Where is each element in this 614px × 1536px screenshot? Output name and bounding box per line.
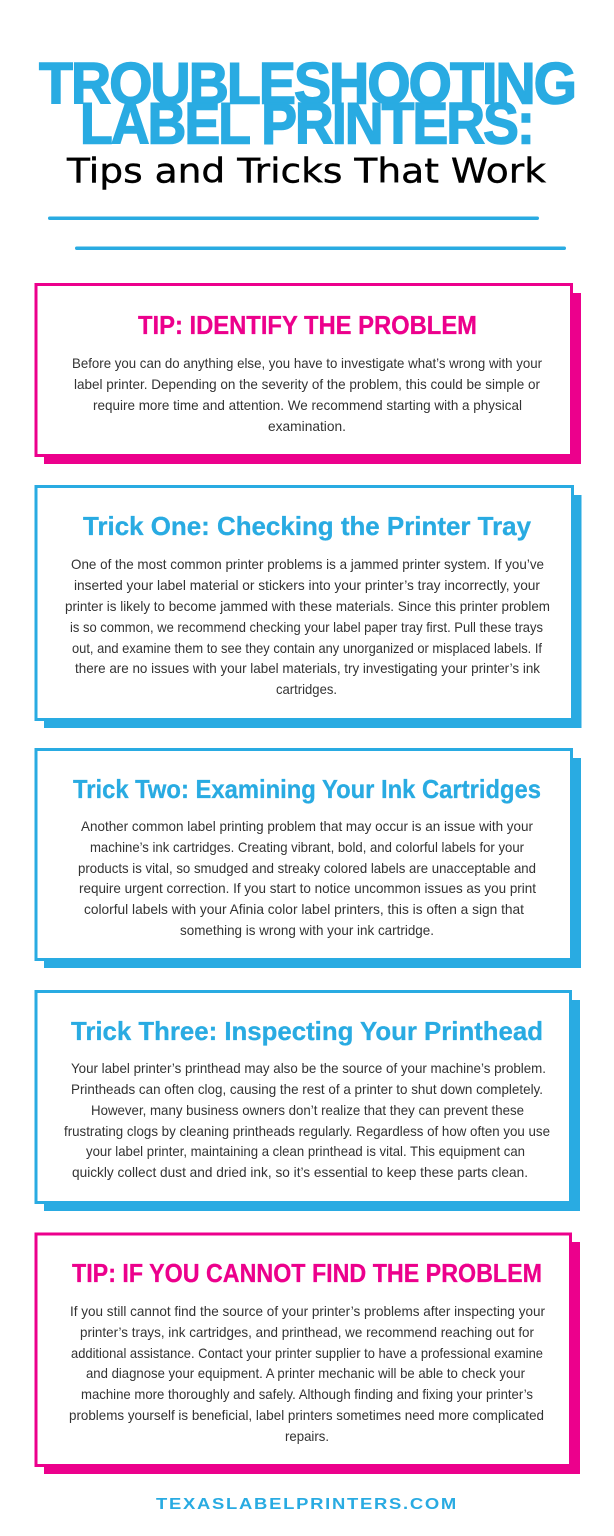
text block: trick three: Printheads can often clog, causing the rest of a printer to shut down completely. [71,1081,543,1097]
text block: trick three: Your label printer’s printhead may also be the source of your machine’s problem. [71,1060,546,1076]
text block: trick two: products is vital, so smudged and streaky colored labels are unacceptable and [78,860,536,876]
title: LABEL PRINTERS: [80,92,533,156]
text block: tip identify the problem: require more time and attention. We recommend starting with a physical [93,397,522,413]
panel: tip identify the problem [36,284,581,464]
panel: trick three [36,992,580,1211]
text block: tip if you cannot find the problem [69,1303,545,1444]
text block: tip identify the problem: Before you can do anything else, you have to investigate what’s wrong with your [72,355,542,371]
text block: trick two [78,818,536,938]
title: TROUBLESHOOTING [39,52,575,116]
text block: trick one: inserted your label material or stickers into your printer’s tray incorrectly, your [74,577,540,593]
text block: trick three [64,1060,550,1180]
text block: tip identify the problem [72,355,542,434]
title: Tips and Tricks That Work [66,152,546,192]
text block: trick one: is so common, we recommend checking your label paper tray first. Pull these trays [70,619,543,635]
heading: tip if you cannot find the problem: TIP: IF YOU CANNOT FIND THE PROBLEM [72,1258,542,1288]
text block: tip if you cannot find the problem: problems yourself is beneficial, label printers sometimes need more complicated [69,1407,544,1423]
footer: website: TEXASLABELPRINTERS.COM [156,1496,458,1513]
text block: trick three: your label printer, maintaining a clean printhead is vital. This equipment can [86,1143,525,1159]
heading: trick two: Trick Two: Examining Your Ink Cartridges [73,774,541,804]
panel: trick two [36,750,581,968]
text block: tip identify the problem: examination. [268,418,346,434]
panel: tip if you cannot find the problem [36,1234,580,1474]
heading: trick three: Trick Three: Inspecting Your Printhead [71,1016,543,1046]
text block: trick two: something is wrong with your ink cartridge. [180,922,434,938]
text block: tip if you cannot find the problem: machine more thoroughly and safely. Although finding and fixing your printer’s [81,1386,533,1402]
text block: trick three: quickly collect dust and dried ink, so it’s essential to keep these parts clean. [72,1164,528,1180]
text block: tip if you cannot find the problem: and diagnose your equipment. A printer mechanic will be able to check your [86,1365,525,1381]
text block: tip if you cannot find the problem: printer’s trays, ink cartridges, and printhead, we recommend reaching out for [80,1324,534,1340]
text block: trick one: there are no issues with your label materials, try investigating your printer’s ink [75,660,541,676]
title [39,52,575,192]
text block: trick two: colorful labels with your Afinia color label printers, this is often a sign that [84,901,524,917]
text block: tip identify the problem: label printer. Depending on the severity of the problem, this could be simple or [74,376,540,392]
text block: tip if you cannot find the problem: repairs. [285,1428,329,1444]
text block: trick two: machine’s ink cartridges. Creating vibrant, bold, and colorful labels for your [90,839,524,855]
text block: trick three: frustrating clogs by cleaning printheads regularly. Regardless of how often you use [64,1123,550,1139]
text block: tip if you cannot find the problem: If you still cannot find the source of your printer’s problems after inspecting your [70,1303,545,1319]
text block: trick two: require urgent correction. If you start to notice uncommon issues as you print [79,880,536,896]
text block: trick two: Another common label printing problem that may occur is an issue with your [81,818,533,834]
text block: trick one: cartridges. [276,681,337,697]
text block: trick one: printer is likely to become jammed with these materials. Since this printer problem [65,598,550,614]
text block: trick one [65,556,550,697]
heading: tip identify the problem: TIP: IDENTIFY THE PROBLEM [138,310,477,340]
heading: trick one: Trick One: Checking the Printer Tray [83,511,532,541]
text block: tip if you cannot find the problem: additional assistance. Contact your printer supplier to have a professional examine [71,1345,543,1361]
panel: trick one [36,486,582,728]
text block: trick one: out, and examine them to see they contain any unorganized or misplaced labels. If [72,640,542,656]
text block: trick one: One of the most common printer problems is a jammed printer system. If you’ve [71,556,544,572]
text block: trick three: However, many business owners don’t realize that they can prevent these [91,1102,524,1118]
